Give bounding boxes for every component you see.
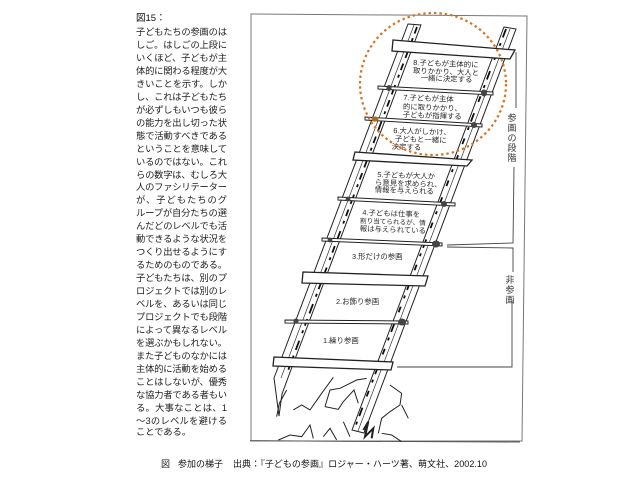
rung: first-upper step [285, 318, 408, 326]
caption: source: 参加の梯子 [178, 458, 223, 469]
level 8 label: 一緒に決定する [421, 73, 473, 84]
panel frame [251, 14, 527, 441]
body paragraph: プロジェクトでも段階 [136, 311, 227, 322]
label: non-participation: 非 [505, 274, 515, 285]
level 8 label: 8.子どもが主体的に [413, 58, 479, 69]
label: non-participation: 参 [505, 284, 515, 295]
body paragraph: 主体的に活動を始める [136, 363, 227, 374]
rung: fifth step [353, 152, 472, 166]
level 4 label: 割り当てられるが、情 [360, 216, 426, 227]
body paragraph: が、子どもたちのグ [136, 194, 227, 205]
level 4 label: 4.子どもは仕事を [362, 208, 420, 219]
body paragraph: ことはしないが、優秀 [136, 376, 227, 387]
body paragraph: 子どもたちは、別のプ [136, 273, 228, 283]
body paragraph: ロジェクトでは別のレ [136, 286, 227, 296]
level 1 label: 1.繰り参画 [323, 336, 359, 345]
rung: seventh step [378, 85, 493, 96]
level 6 label: 6.大人がしかけ、 [393, 126, 451, 137]
level 4 label [360, 208, 427, 235]
body paragraph: つくり出せるようにす [136, 246, 227, 257]
label: participation stages: 段 [507, 142, 517, 153]
body paragraph: ことである。 [136, 427, 191, 437]
rung: top step [392, 40, 515, 59]
body paragraph: きいことを示す。しか [136, 79, 227, 89]
body paragraph: し、これは子どもたち [136, 92, 227, 102]
label: non-participation [505, 274, 515, 305]
body paragraph: 動できるような状況を [136, 233, 227, 244]
level 4 label: 報は与えられている [360, 224, 426, 235]
body paragraph: 人のファシリテーター [136, 182, 227, 192]
level 7 label [403, 93, 463, 121]
caption: source: 出典：『子どもの参画』ロジャー・ハーツ著、萌文社、2002.10 [233, 458, 487, 469]
body paragraph: いるのではない。これ [136, 157, 228, 167]
body paragraph: 子どもたちの参画のは [136, 26, 227, 37]
level 3 label: 3.形だけの参画 [352, 252, 403, 261]
label: participation stages: 画 [507, 123, 517, 133]
label: participation stages [507, 112, 517, 163]
ladder level labels [323, 58, 480, 345]
body paragraph: ループが自分たちの選 [136, 207, 227, 218]
body paragraph: が必ずしもいつも彼ら [136, 104, 227, 115]
label: participation stages: 階 [507, 153, 517, 163]
level 7 label: 的に取りかかり、 [403, 102, 462, 113]
label: participation stages: 参 [507, 112, 517, 123]
body paragraph: ～3のレベルを避ける [136, 416, 227, 426]
level 6 label [392, 126, 451, 153]
body paragraph: んだどのレベルでも活 [136, 220, 227, 231]
body paragraph [136, 26, 228, 437]
level 6 label: 決定する [392, 142, 421, 152]
rung: fourth step [338, 197, 455, 207]
body paragraph: ということを意味して [136, 143, 227, 154]
level 8 label [413, 58, 480, 84]
rung: bottom step [273, 357, 393, 370]
level 5 label [375, 170, 442, 196]
ladder right rail [352, 27, 516, 433]
level 7 label: 子どもが指揮する [403, 110, 462, 121]
bracket: participation stages [447, 52, 517, 245]
level 5 label: 情報を与えられる [375, 185, 434, 196]
body paragraph: によって異なるレベル [136, 325, 227, 335]
ladder illustration panel [250, 13, 527, 442]
body paragraph: な協力者である者もい [136, 389, 227, 400]
level 2 label: 2.お飾り参画 [336, 297, 379, 306]
level 5 label: 5.子どもが大人か [377, 170, 436, 181]
level 6 label: 子どもと一緒に [395, 134, 447, 145]
ladder left rail [274, 24, 421, 416]
label: non-participation: 画 [505, 295, 515, 305]
body paragraph: の能力を出し切った状 [136, 117, 228, 128]
rung: sixth step [365, 116, 482, 128]
body paragraph: いくほど、子どもが主 [136, 52, 227, 63]
highlight: orange dotted circle [360, 13, 506, 155]
ladder ground and bushes [250, 377, 520, 442]
bracket: non-participation [397, 247, 515, 367]
level 5 label: ら意見を求められ、 [375, 178, 442, 189]
body paragraph: る。大事なことは、1 [136, 402, 227, 413]
caption: source: 図 [161, 459, 170, 469]
body paragraph: を選ぶかもしれない。 [136, 338, 227, 348]
rung: second step [302, 272, 428, 286]
text block: explanation of figure 15 [136, 13, 228, 437]
body paragraph: るためのものである。 [136, 260, 227, 270]
body paragraph: また子どものなかには [136, 351, 227, 361]
body paragraph: 態で活動すべきである [136, 130, 227, 141]
rung: third step [322, 238, 442, 248]
body paragraph: 体的に関わる程度が大 [136, 65, 227, 76]
body paragraph: しご。はしごの上段に [136, 39, 227, 50]
heading: figure number: 図15： [136, 13, 166, 24]
body paragraph: ベルを、あるいは同じ [136, 299, 227, 309]
level 8 label: 取りかかり、大人と [413, 66, 479, 77]
level 7 label: 7.子どもが主体 [403, 93, 455, 104]
body paragraph: らの数字は、むしろ大 [136, 169, 227, 180]
label: participation stages: の [507, 133, 517, 143]
